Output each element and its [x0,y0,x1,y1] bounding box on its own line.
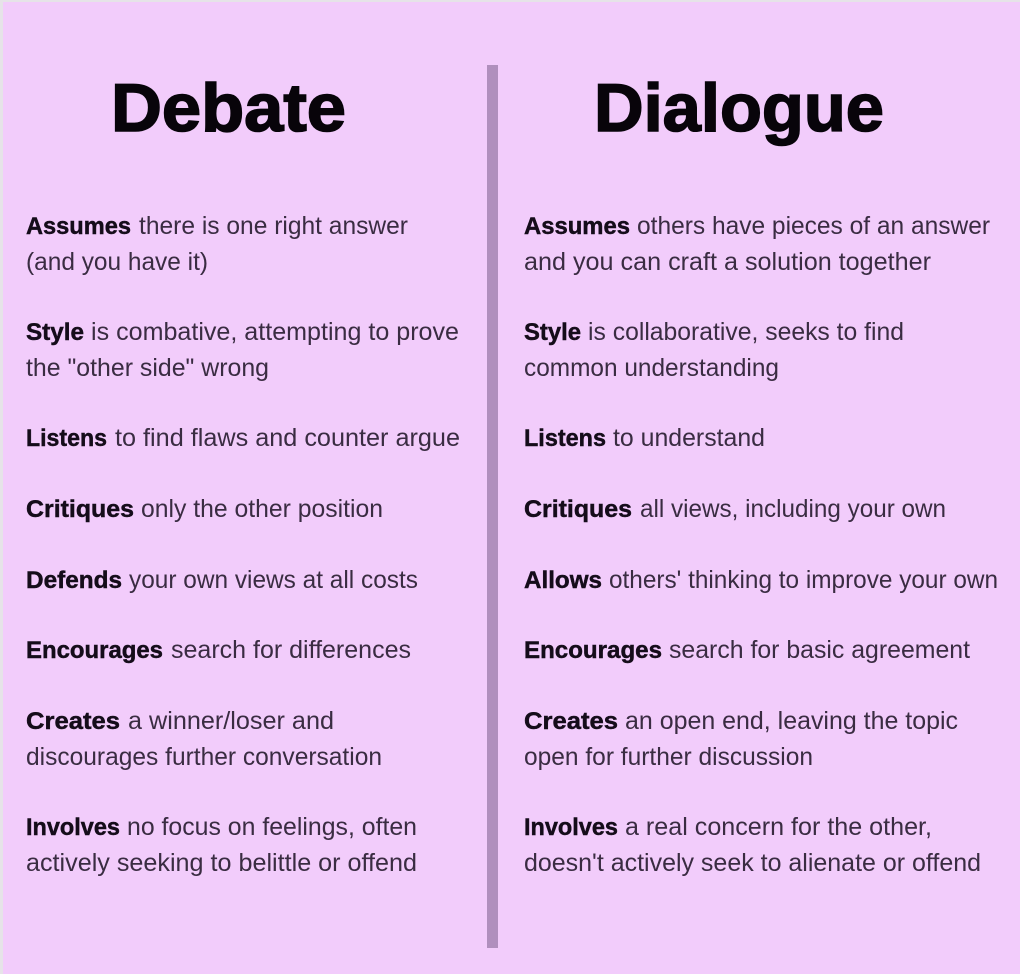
dialogue: assumes [524,212,990,276]
dialogue: creates [524,707,958,771]
dialogue: involves: doesn't actively seek to alienate or offend [524,849,981,877]
debate: creates: Creates [26,708,120,735]
dialogue: creates: Creates [524,708,618,735]
debate: critiques [26,495,383,523]
dialogue: allows: Allows [524,567,602,594]
dialogue: critiques: all views, including your own [640,495,946,523]
column divider [487,65,498,948]
dialogue: encourages: search for basic agreement [669,636,970,664]
debate: assumes: there is one right answer [139,212,408,240]
panel: debate column [26,70,460,877]
debate: defends: your own views at all costs [129,566,418,594]
heading: Dialogue: Dialogue [594,70,884,146]
panel: dialogue column [524,70,998,877]
debate: encourages: Encourages [26,637,163,664]
debate: listens: Listens [26,425,107,452]
heading: Debate: Debate [111,70,346,146]
dialogue: style: is collaborative, seeks to find [588,318,904,346]
debate: assumes [26,212,408,276]
debate: creates: a winner/loser and [128,707,334,735]
debate: involves: Involves [26,814,120,841]
debate: style [26,318,459,382]
dialogue: style: common understanding [524,354,779,382]
debate: involves: actively seeking to belittle or offend [26,849,417,877]
debate: critiques: Critiques [26,496,134,523]
dialogue: critiques: Critiques [524,496,632,523]
debate: involves [26,813,417,877]
debate: style: Style [26,319,84,346]
dialogue: creates: an open end, leaving the topic [625,707,958,735]
debate: assumes: Assumes [26,213,131,240]
dialogue: listens [524,424,765,452]
dialogue: assumes: Assumes [524,213,630,240]
debate: assumes: (and you have it) [26,248,208,276]
dialogue: listens: Listens [524,425,606,452]
debate: involves: no focus on feelings, often [127,813,417,841]
debate: listens: to find flaws and counter argue [115,424,460,452]
dialogue: style: Style [524,319,581,346]
debate: style: the "other side" wrong [26,354,269,382]
debate: creates: discourages further conversation [26,743,382,771]
dialogue: creates: open for further discussion [524,743,813,771]
dialogue: allows: others' thinking to improve your own [609,566,998,594]
dialogue: style [524,318,904,382]
debate: defends: Defends [26,567,122,594]
dialogue: assumes: and you can craft a solution together [524,248,931,276]
dialogue: listens: to understand [613,424,765,452]
dialogue: encourages [524,636,970,664]
dialogue: involves: a real concern for the other, [625,813,932,841]
debate: encourages: search for differences [171,636,411,664]
dialogue: involves: Involves [524,814,618,841]
debate: encourages [26,636,411,664]
dialogue: encourages: Encourages [524,637,662,664]
debate: creates [26,707,382,771]
dialogue: assumes: others have pieces of an answer [637,212,990,240]
dialogue: involves [524,813,981,877]
debate: style: is combative, attempting to prove [91,318,459,346]
debate: critiques: only the other position [141,495,383,523]
